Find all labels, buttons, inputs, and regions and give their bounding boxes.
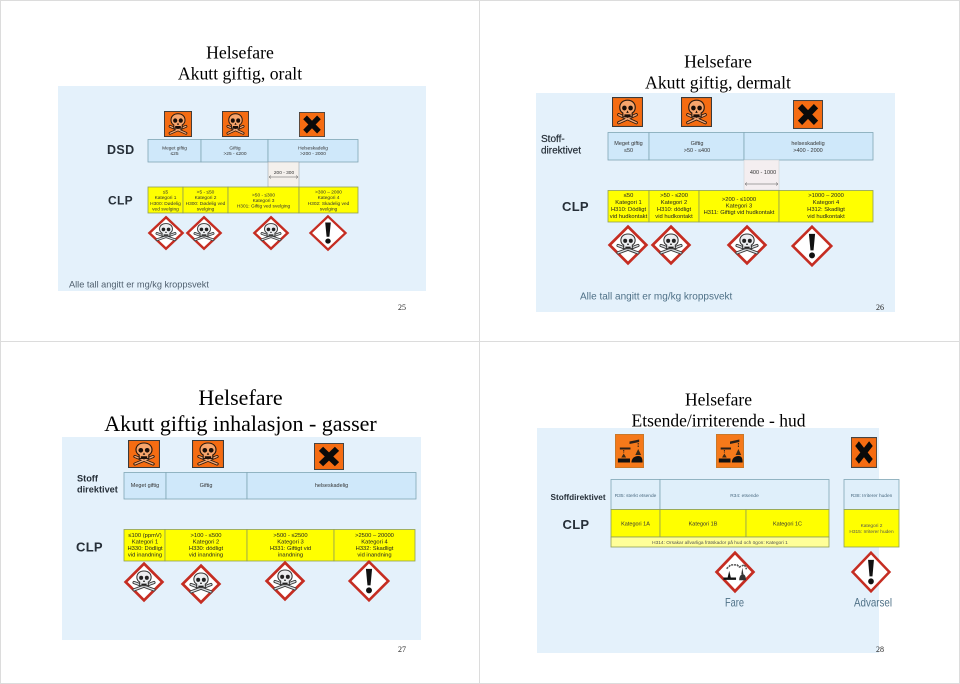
Stoffdirektivet bar: helseskadelig (791, 141, 825, 147)
right hazard table (844, 480, 899, 547)
label: DSD: DSD (107, 143, 135, 157)
DSD bar: Giftig (229, 146, 241, 152)
CLP bar: Kategori 3 (253, 198, 275, 204)
title: Akutt giftig inhalasjon - gasser (104, 411, 377, 436)
icon: GHS skull 3 (254, 217, 288, 249)
icon: harmful cross (299, 112, 325, 137)
title: Etsende/irriterende - hud (632, 410, 806, 430)
CLP bar: H311: Giftigt vid hudkontakt (704, 210, 775, 216)
panel: slide 25, oral toxicity (58, 42, 426, 312)
footnote: Alle tall angitt er mg/kg kroppsvekt (69, 280, 209, 290)
panel: slide 26, dermal toxicity (536, 52, 895, 312)
title: Helsefare (206, 42, 274, 62)
range bracket 400-1000 (744, 160, 779, 190)
CLP bar: vid hudkontakt (655, 214, 693, 220)
label: CLP: CLP (562, 199, 589, 214)
CLP bar: >200 - ≤1000 (722, 197, 756, 203)
icon: GHS skull 1 (610, 227, 646, 263)
icon: harmful cross (794, 101, 822, 128)
Stoffdirektivet bar: >400 - 2000 (793, 148, 823, 154)
icon: toxic skull 2 (193, 440, 223, 468)
CLP bar: inandning (278, 552, 303, 558)
CLP bar: Kategori 3 (726, 204, 752, 210)
DSD bar: Meget giftig (162, 146, 187, 152)
icon: GHS skull 1 (126, 564, 162, 600)
icon: harmful cross (314, 443, 344, 470)
Stoffdirektivet bar (124, 472, 416, 499)
icon: corrosive 1 (615, 434, 644, 468)
CLP bar: vid hudkontakt (610, 214, 648, 220)
slide background (537, 428, 879, 653)
label: Stoffdirektivet: direktivet (541, 146, 581, 156)
CLP bar: H310: Dödligt (611, 207, 646, 213)
CLP bar (608, 190, 873, 222)
CLP bar (124, 530, 415, 561)
CLP bar (148, 187, 358, 213)
CLP bar: H330: dödligt (189, 546, 223, 552)
CLP bar: vid inandning (128, 552, 162, 558)
CLP bar: ved svelging (152, 206, 179, 212)
page number: 26 (876, 303, 884, 312)
CLP bar: ≤100 (ppmV) (128, 533, 162, 539)
icon: irritant cross (851, 438, 877, 467)
Stoffdirektivet bar: Giftig (200, 483, 212, 489)
CLP bar: H312: Skadligt (807, 207, 845, 213)
CLP bar: H331: Giftigt vid (270, 546, 311, 552)
icon: GHS skull 2 (653, 227, 689, 263)
CLP bar: ≤50 (624, 193, 633, 199)
right hazard table: H315: Irriterer huden (849, 529, 894, 535)
Stoffdirektivet bar: helseskadelig (315, 483, 348, 489)
icon: GHS skull 3 (267, 563, 303, 599)
icon: toxic skull 1 (129, 440, 159, 468)
title: Akutt giftig, dermalt (645, 72, 791, 92)
CLP bar: H330: Dödligt (127, 546, 163, 552)
right hazard table: R38: Irriterer huden (851, 493, 893, 499)
DSD bar: Helseskadelig (298, 146, 328, 152)
left hazard table: R34: etsende (730, 493, 759, 499)
range bracket 400-1000: 400 - 1000 (750, 170, 776, 176)
title: Helsefare (198, 385, 283, 410)
range bracket 200-300: 200 - 300 (274, 170, 294, 176)
CLP bar: >300 – 2000 (315, 190, 342, 196)
label: Fare: Fare (725, 596, 744, 610)
DSD bar: >25 - ≤200 (223, 151, 247, 157)
CLP bar: >5 - ≤50 (197, 190, 215, 196)
CLP bar: Kategori 1 (132, 540, 158, 546)
left hazard table: R35: sterkt etsende (615, 493, 657, 499)
footnote: Alle tall angitt er mg/kg kroppsvekt (580, 292, 733, 302)
page number: 25 (398, 303, 406, 312)
Stoffdirektivet bar: ≤50 (624, 148, 633, 154)
panel: slide 28, corrosive and irritant (537, 390, 899, 654)
CLP bar: svelging (197, 206, 215, 212)
left hazard table (611, 480, 829, 547)
icon: GHS exclamation (310, 216, 346, 250)
CLP bar: >100 - ≤500 (190, 533, 222, 539)
title: Helsefare (685, 390, 752, 410)
CLP bar: >2500 – 20000 (355, 533, 394, 539)
icon: GHS skull 2 (187, 217, 221, 249)
CLP bar: H332: Skadligt (356, 546, 394, 552)
left hazard table: Kategori 1C (773, 522, 802, 528)
CLP bar: Kategori 2 (661, 200, 687, 206)
Stoffdirektivet bar: Meget giftig (614, 141, 643, 147)
right hazard table: Kategori 2 (861, 523, 883, 529)
label: Stoff direktivet: direktivet (77, 484, 118, 494)
CLP bar: Kategori 4 (813, 200, 840, 206)
CLP bar: >50 - ≤300 (252, 192, 275, 198)
CLP bar: Kategori 2 (195, 195, 217, 201)
CLP bar: >50 - ≤200 (660, 193, 688, 199)
icon: toxic skull 1 (613, 98, 642, 126)
page number: 27 (398, 645, 406, 654)
icon: GHS exclamation (853, 553, 889, 591)
CLP bar: ≤5 (163, 190, 168, 196)
CLP bar: vid inandning (189, 552, 223, 558)
CLP bar: svelging (320, 206, 338, 212)
Stoffdirektivet bar (608, 132, 873, 160)
label: Stoffdirektivet: Stoffdirektivet (550, 493, 606, 502)
label: CLP: CLP (108, 194, 133, 208)
DSD bar: ≤25 (171, 151, 179, 157)
CLP bar: H300: Dødelig (150, 201, 181, 207)
label: CLP: CLP (562, 517, 589, 532)
range bracket 200-300 (268, 162, 299, 187)
DSD bar: >200 - 2000 (300, 151, 326, 157)
icon: GHS exclamation (350, 562, 388, 600)
left hazard table: H314: Orsakar allvarliga frätskador på hud och ögon: Kategori 1 (652, 539, 788, 546)
icon: GHS skull 2 (183, 566, 219, 602)
CLP bar: Kategori 3 (277, 540, 304, 546)
CLP bar: Kategori 4 (361, 540, 388, 546)
slide background (62, 437, 421, 640)
slide background (58, 86, 426, 291)
icon: corrosive 2 (716, 434, 744, 468)
icon: GHS skull 3 (729, 227, 765, 263)
label: Advarsel: Advarsel (854, 596, 892, 610)
Stoffdirektivet bar: >50 - ≤400 (684, 148, 710, 154)
CLP bar: Kategori 1 (615, 200, 642, 206)
icon: toxic skull 2 (222, 111, 249, 137)
left hazard table: Kategori 1B (689, 522, 718, 528)
CLP bar: vid hudkontakt (807, 214, 845, 220)
title: Akutt giftig, oralt (178, 64, 302, 84)
left hazard table: Kategori 1A (621, 522, 650, 528)
icon: toxic skull 2 (682, 98, 711, 126)
CLP bar: Kategori 2 (193, 540, 219, 546)
CLP bar: Kategori 4 (318, 195, 340, 201)
CLP bar: Kategori 1 (155, 195, 177, 201)
CLP bar: H310: dödligt (657, 207, 691, 213)
page number: 28 (876, 645, 884, 654)
CLP bar: >500 - ≤2500 (273, 533, 308, 539)
CLP bar: >1000 – 2000 (808, 193, 844, 199)
CLP bar: H302: Skadelig ved (308, 201, 350, 207)
icon: GHS skull 1 (149, 217, 183, 249)
label: Stoff direktivet: Stoff (77, 474, 99, 484)
panel: slide 27, inhalation toxicity (62, 385, 421, 654)
label: Stoffdirektivet: Stoff- (541, 134, 565, 145)
CLP bar: H301: Giftig ved svelging (237, 204, 290, 210)
icon: toxic skull 1 (164, 111, 192, 137)
title: Helsefare (684, 52, 752, 72)
CLP bar: H300: Dødelig ved (186, 201, 226, 207)
icon: GHS corrosive (717, 553, 753, 591)
icon: GHS exclamation (793, 227, 831, 265)
DSD bar (148, 140, 358, 162)
slide background (536, 93, 895, 312)
CLP bar: vid inandning (357, 552, 392, 558)
Stoffdirektivet bar: Giftig (691, 141, 703, 147)
label: CLP: CLP (76, 540, 103, 554)
Stoffdirektivet bar: Meget giftig (131, 483, 159, 489)
